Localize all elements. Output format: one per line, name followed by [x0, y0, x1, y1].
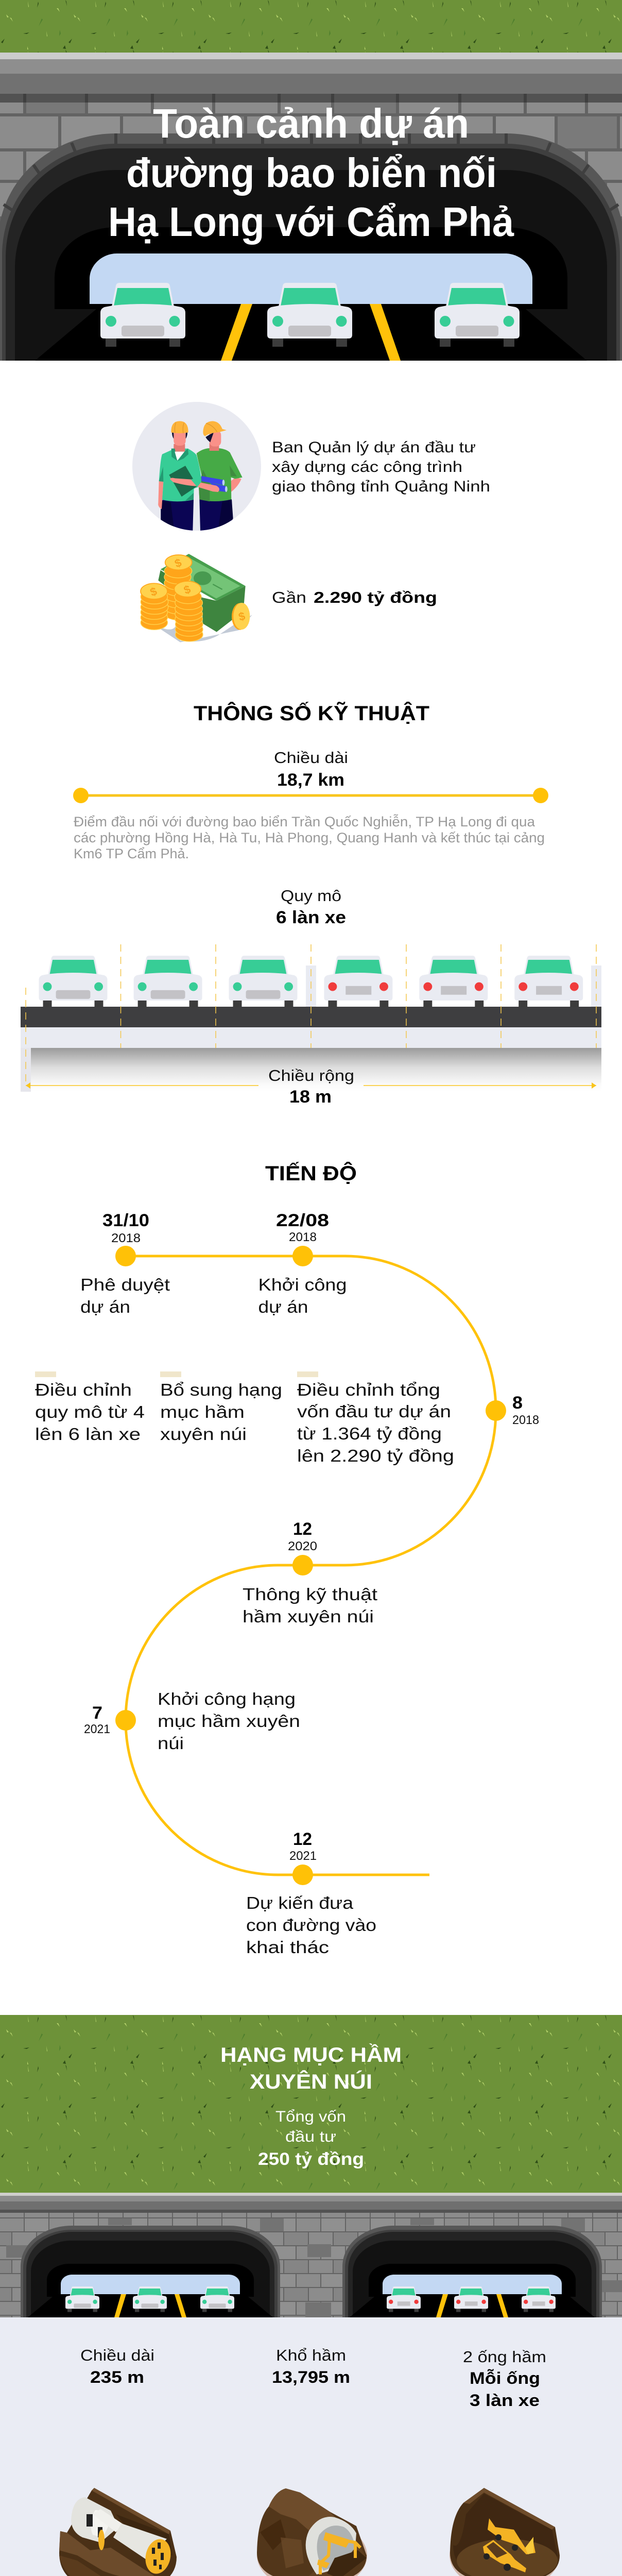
tunnel arch [0, 133, 622, 361]
fact: two tubes: 2 ống hầm [463, 2348, 546, 2366]
right tunnel [342, 2226, 602, 2317]
icon: money and coin stacks [141, 554, 252, 642]
width spec: 18 m [289, 1087, 332, 1107]
publisher text: Ban Quản lý dự án đầu tư [272, 439, 476, 456]
scale spec: 6 làn xe [276, 908, 346, 927]
length spec: Chiều dài [274, 749, 348, 767]
heading: mountain tunnel item: XUYÊN NÚI [250, 2070, 372, 2093]
route description: các phường Hồng Hà, Hà Tu, Hà Phong, Quang Hanh và kết thúc tại cảng [74, 830, 545, 845]
total capital: 250 tỷ đồng [258, 2149, 364, 2169]
icon: money and coin stacks: $ [148, 585, 159, 599]
grass band [0, 0, 622, 53]
brick wall [0, 2213, 622, 2317]
milestone: 12/2020: hầm xuyên núi [243, 1607, 374, 1626]
note: scale adjustment: lên 6 làn xe [35, 1425, 141, 1444]
milestone: 31/10/2018: 31/10 [102, 1211, 149, 1230]
fact: two tubes: Mỗi ống [470, 2369, 540, 2387]
title: Toàn cảnh dự án [153, 100, 469, 146]
width spec: Chiều rộng [268, 1066, 354, 1084]
publisher text: giao thông tỉnh Quảng Ninh [272, 478, 490, 495]
note: capital adjustment: từ 1.364 tỷ đồng [297, 1424, 442, 1443]
note: tunnel addition: mục hầm [160, 1402, 245, 1421]
icon: two construction workers [132, 402, 261, 531]
total capital [258, 2108, 364, 2169]
cars on six lanes [39, 956, 583, 1007]
brick wall [0, 94, 622, 361]
icon: tunnel boring machine [59, 2488, 177, 2576]
milestone: 22/08/2018: Khởi công [258, 1275, 347, 1294]
lane dividers [26, 944, 596, 1085]
milestone: 7/2021: Khởi công hạng [158, 1689, 296, 1708]
heading: mountain tunnel item: HẠNG MỤC HẦM [220, 2043, 402, 2066]
milestone: 12/2020: 12 [293, 1519, 312, 1539]
fact: two tubes [463, 2348, 546, 2410]
note: capital adjustment: lên 2.290 tỷ đồng [297, 1446, 454, 1465]
milestone: 7/2021: núi [158, 1734, 184, 1753]
car 3 [435, 283, 520, 347]
route description: Km6 TP Cẩm Phả. [74, 846, 189, 861]
length spec [274, 749, 348, 790]
note: scale adjustment: Điều chỉnh [35, 1380, 132, 1399]
milestone: 12/2021: 2021 [289, 1849, 317, 1863]
icon: money and coin stacks: $ [237, 609, 247, 623]
icon: money and coin stacks: $ [182, 583, 192, 597]
timeline path [115, 1246, 506, 1885]
milestone: 7/2021: 2021 [84, 1722, 110, 1736]
milestone: 12/2021: Dự kiến đưa [246, 1893, 354, 1912]
milestone: 7/2021 [84, 1689, 300, 1753]
width spec [268, 1066, 354, 1107]
milestone: 8/2018: 8 [512, 1393, 523, 1413]
fact: tunnel length: Chiều dài [80, 2346, 154, 2364]
publisher text: xây dựng các công trình [272, 459, 462, 476]
road lane markings [221, 304, 401, 361]
milestone: 12/2021: khai thác [246, 1938, 329, 1957]
route description [74, 814, 545, 861]
heading: technical specifications: THÔNG SỐ KỸ THUẬT [194, 701, 429, 725]
left tunnel [21, 2226, 280, 2317]
fact: tunnel length [80, 2346, 154, 2386]
investment text [272, 588, 437, 606]
total capital: đầu tư [285, 2128, 336, 2145]
note: tunnel addition: Bổ sung hạng [160, 1380, 282, 1399]
length spec: 18,7 km [277, 770, 344, 790]
icon: tunnel portal with gantry [257, 2488, 367, 2576]
milestone: 7/2021: mục hầm xuyên [158, 1711, 300, 1731]
investment text: 2.290 tỷ đồng [314, 588, 437, 606]
car 1 [100, 283, 185, 347]
scale spec [276, 887, 346, 927]
fact: two tubes: 3 làn xe [470, 2391, 540, 2410]
milestone: 22/08/2018: dự án [258, 1297, 308, 1316]
icon: money and coin stacks: $ [173, 556, 183, 570]
milestone: 12/2020: 2020 [288, 1539, 317, 1553]
note: capital adjustment: vốn đầu tư dự án [297, 1402, 451, 1421]
note: capital adjustment: Điều chỉnh tổng [297, 1380, 440, 1399]
diagram: six-lane road cross-section [21, 944, 601, 1092]
milestone: 8/2018: 2018 [512, 1413, 539, 1427]
milestone: 12/2021: con đường vào [246, 1916, 376, 1935]
total capital: Tổng vốn [275, 2108, 346, 2125]
note: tunnel addition: xuyên núi [160, 1425, 247, 1444]
road surface [21, 965, 601, 1092]
milestone: 12/2021 [246, 1829, 376, 1957]
milestone: 22/08/2018: 2018 [289, 1230, 317, 1244]
milestone: 22/08/2018 [258, 1211, 347, 1316]
panel: hero tunnel header [0, 0, 622, 361]
note: scale adjustment [35, 1371, 145, 1444]
title [108, 100, 514, 245]
route description: Điểm đầu nối với đường bao biển Trần Quốc Nghiễn, TP Hạ Long đi qua [74, 814, 535, 829]
title: Hạ Long với Cẩm Phả [108, 199, 514, 245]
milestone: 7/2021: 7 [92, 1703, 102, 1723]
note: capital adjustment [297, 1371, 454, 1465]
note: scale adjustment: quy mô từ 4 [35, 1402, 145, 1421]
tunnel parapet [0, 53, 622, 103]
length bar [73, 788, 548, 803]
heading: progress: TIẾN ĐỘ [265, 1161, 357, 1185]
milestone: 8/2018 [512, 1393, 539, 1427]
milestone: 31/10/2018: Phê duyệt [80, 1275, 170, 1294]
panel: mountain tunnel header [0, 2015, 622, 2193]
car 2 [267, 283, 352, 347]
milestone: 31/10/2018: 2018 [111, 1231, 141, 1245]
width arrow [26, 1082, 596, 1089]
panel: tunnel facts background [0, 2317, 622, 2576]
grass band [0, 2015, 622, 2193]
milestone: 12/2021: 12 [293, 1829, 312, 1849]
parapet [0, 2193, 622, 2213]
milestone: 12/2020 [243, 1519, 377, 1626]
panel: twin tunnels [0, 2193, 622, 2317]
milestone: 12/2020: Thông kỹ thuật [243, 1585, 377, 1604]
icon: excavation vehicles [450, 2488, 560, 2576]
fact: tunnel width: Khổ hầm [276, 2346, 346, 2364]
investment text: Gần [272, 588, 306, 606]
fact: tunnel width: 13,795 m [272, 2368, 350, 2386]
milestone: 31/10/2018 [80, 1211, 170, 1316]
note: tunnel addition [160, 1371, 282, 1444]
publisher text [272, 439, 490, 495]
tunnel exit sky [90, 253, 532, 304]
heading: mountain tunnel item [220, 2043, 402, 2093]
fact: tunnel length: 235 m [90, 2368, 144, 2386]
fact: tunnel width [272, 2346, 350, 2386]
milestone: 22/08/2018: 22/08 [276, 1211, 329, 1230]
milestone: 31/10/2018: dự án [80, 1297, 130, 1316]
scale spec: Quy mô [281, 887, 341, 905]
title: đường bao biển nối [126, 150, 497, 196]
